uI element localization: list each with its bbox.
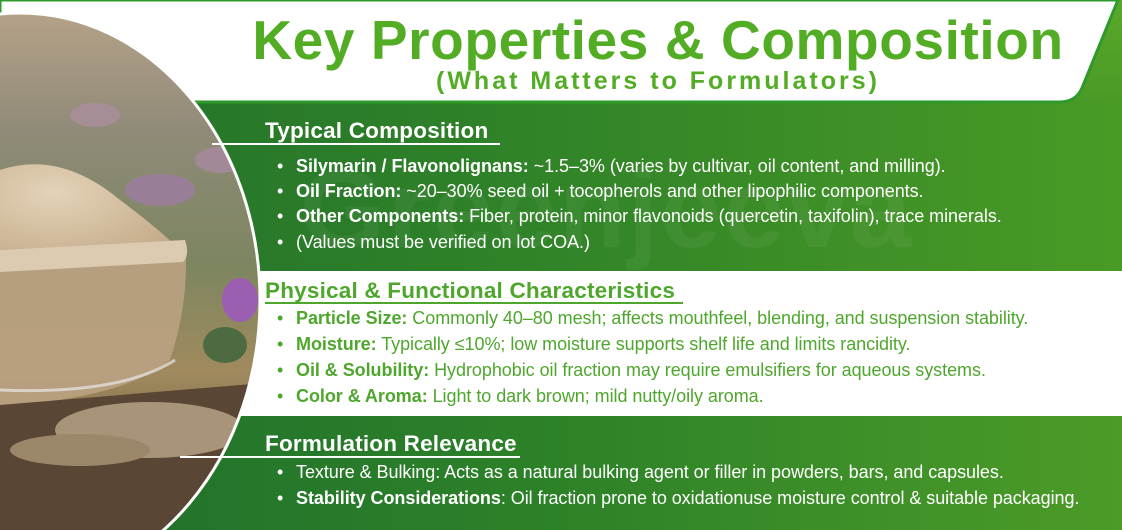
text: (Values must be verified on lot COA.) [296,232,590,252]
green band bottom [0,416,1122,530]
text: Color & Aroma: Light to dark brown; mild nutty/oily aroma. [296,386,764,406]
heading: physical: Physical & Functional Characteristics [265,278,675,303]
text: Other Components: Fiber, protein, minor flavonoids (quercetin, taxifolin), trace minerals. [296,206,1002,226]
text: Oil & Solubility: Hydrophobic oil fraction may require emulsifiers for aqueous systems. [296,360,986,380]
photo circle [0,12,260,530]
header panel [0,0,1120,104]
section: typical composition [212,118,1002,252]
underline [265,302,683,304]
green band top [0,100,1122,271]
text: Texture & Bulking: Acts as a natural bulking agent or filler in powders, bars, and capsules. [296,462,1004,482]
bullets [278,156,1002,252]
subtitle: (What Matters to Formulators) [436,67,880,95]
text: Moisture: Typically ≤10%; low moisture supports shelf life and limits rancidity. [296,334,910,354]
title: Key Properties & Composition [252,9,1064,71]
top right green corner [1000,0,1122,100]
text: Silymarin / Flavonolignans: ~1.5–3% (varies by cultivar, oil content, and milling). [296,156,946,176]
watermark: Greenjeeva [300,148,913,271]
underline [212,143,500,145]
bullets [278,462,1079,508]
heading: formulation: Formulation Relevance [265,431,517,456]
section: formulation relevance [180,431,1079,508]
heading: typical composition: Typical Composition [265,118,488,143]
white band middle [0,271,1122,416]
text: Oil Fraction: ~20–30% seed oil + tocopherols and other lipophilic components. [296,181,924,201]
underline [180,456,520,458]
text: Stability Considerations: Oil fraction prone to oxidationuse moisture control & suitable packaging. [296,488,1079,508]
text: Particle Size: Commonly 40–80 mesh; affects mouthfeel, blending, and suspension stability. [296,308,1028,328]
bullets [278,308,1028,406]
section: physical characteristics [265,278,1028,406]
